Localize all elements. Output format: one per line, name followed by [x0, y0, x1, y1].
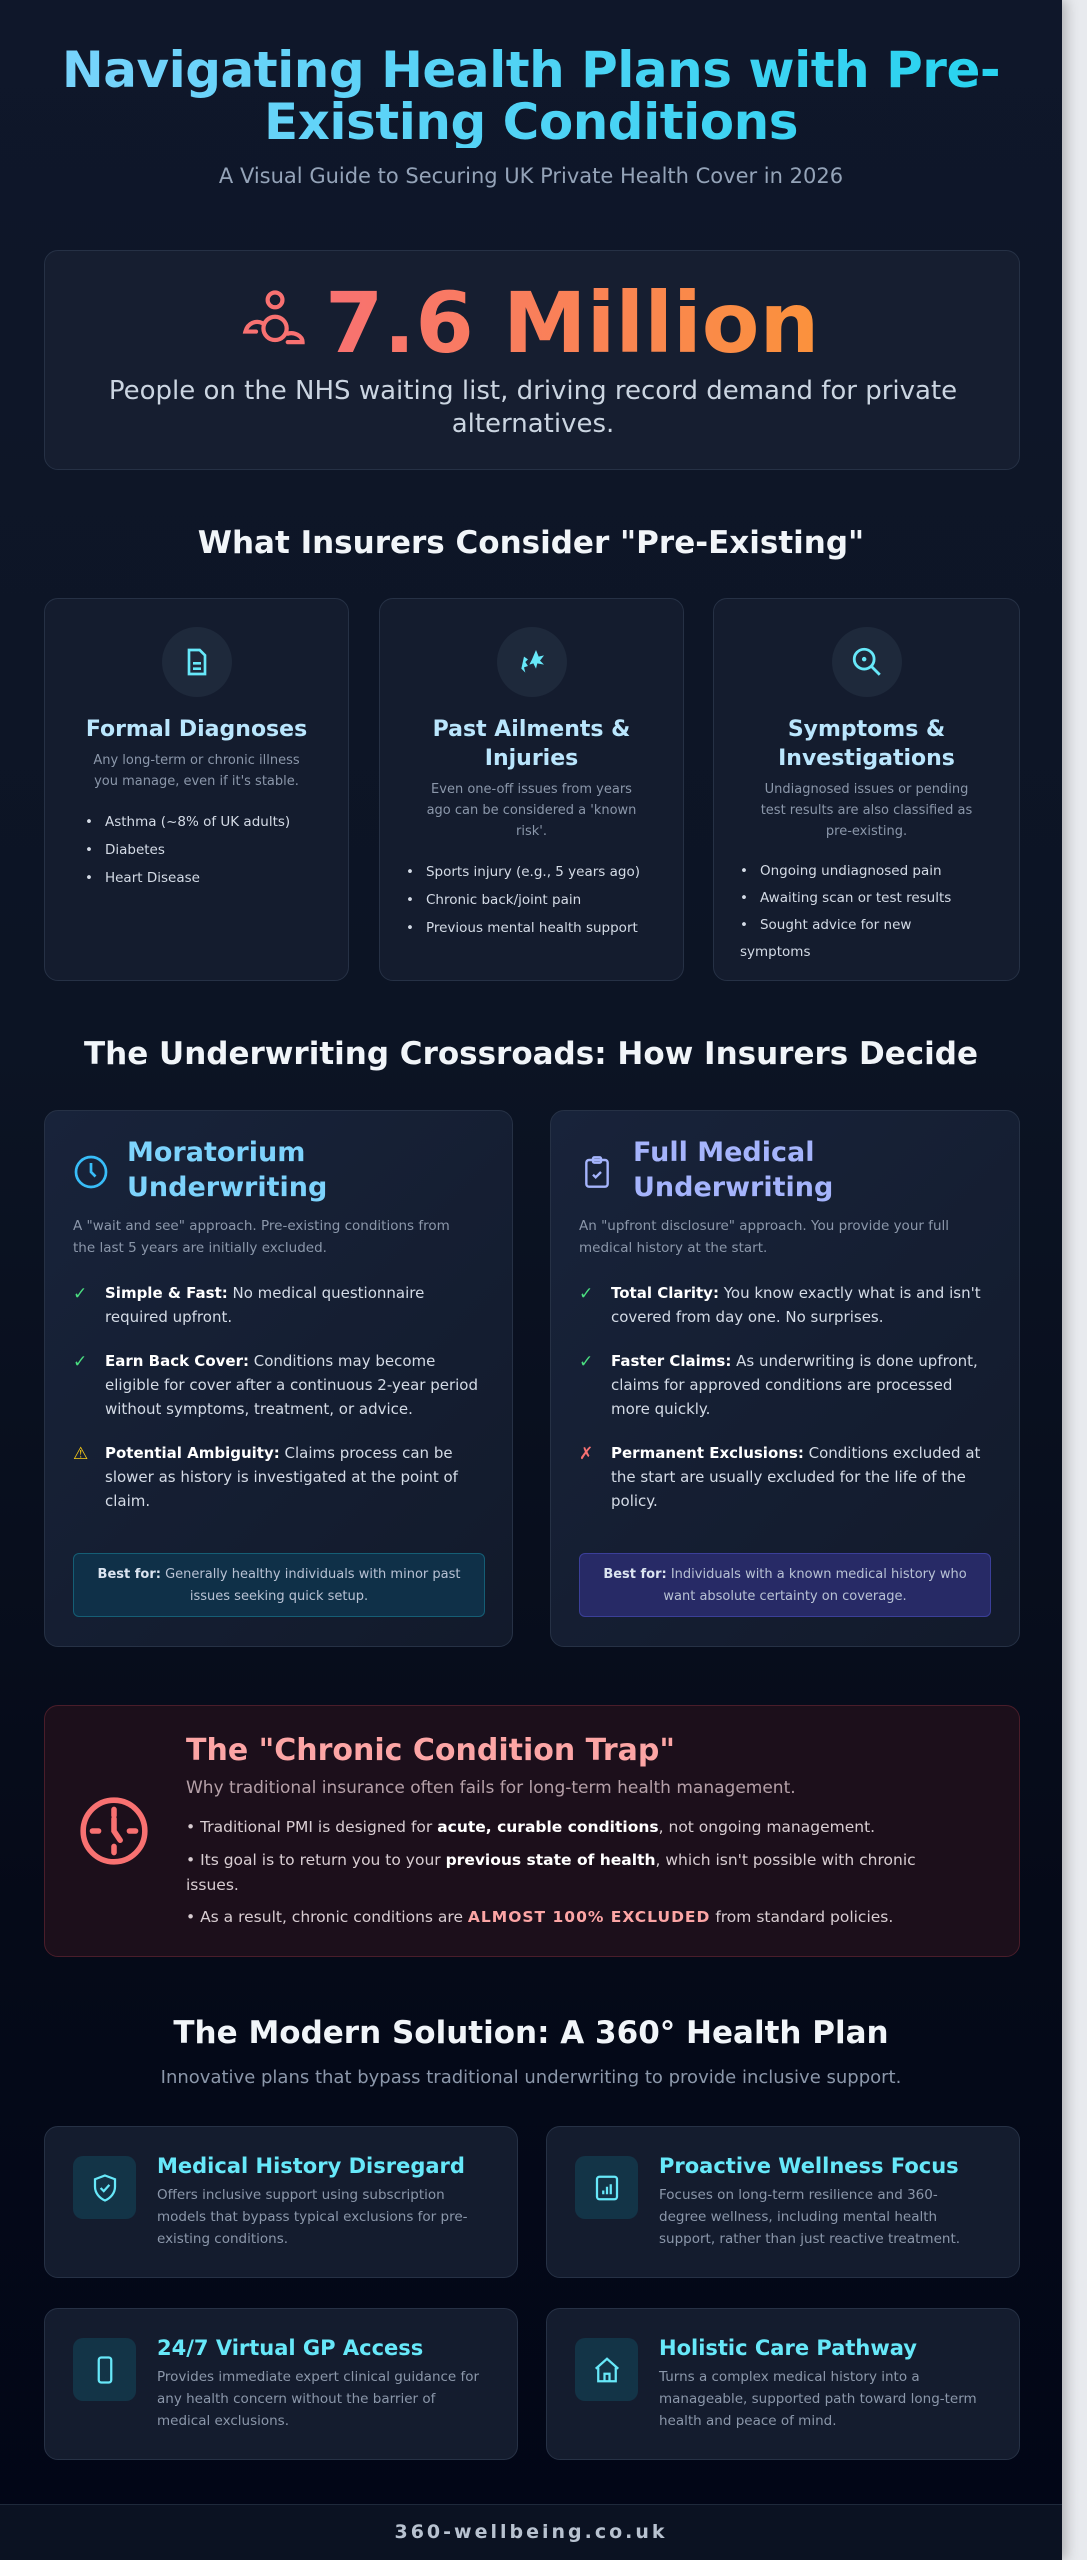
- big number: 7.6 Million: [325, 274, 819, 372]
- panel: past ailments: Previous mental health support: [426, 920, 638, 936]
- panel: chronic condition trap: [44, 1705, 1020, 1957]
- feature: holistic care: Turns a complex medical history into a manageable, supported path toward long-term health and peace of mind.: [659, 2369, 977, 2429]
- panel: full medical: ✓: [579, 1284, 593, 1304]
- panel: moratorium: Moratorium: [127, 1137, 305, 1168]
- panel: moratorium: Simple & Fast: No medical questionnaire required upfront.: [105, 1284, 424, 1326]
- subtitle: A Visual Guide to Securing UK Private Health Cover in 2026: [219, 164, 843, 188]
- icon: injury: [496, 627, 566, 697]
- feature: virtual gp: 24/7 Virtual GP Access: [157, 2336, 423, 2360]
- panel: chronic condition trap: • Traditional PMI is designed for acute, curable conditions, not ongoing management.: [186, 1818, 875, 1836]
- panel: formal diagnoses: Diabetes: [105, 842, 165, 858]
- feature: proactive wellness: Focuses on long-term resilience and 360-degree wellness, including mental health support, rather than just reactive treatment.: [659, 2187, 960, 2247]
- panel: chronic condition trap: The "Chronic Condition Trap": [186, 1733, 675, 1768]
- heading: modern solution: The Modern Solution: A 360° Health Plan: [173, 2015, 889, 2051]
- panel: moratorium: ✓: [73, 1352, 87, 1372]
- heading: pre-existing: What Insurers Consider "Pre-Existing": [198, 525, 864, 561]
- icon: stopwatch: [80, 1797, 148, 1865]
- panel: formal diagnoses: Any long-term or chronic illness you manage, even if it's stable.: [93, 753, 300, 789]
- panel: past ailments: Chronic back/joint pain: [426, 892, 581, 908]
- icon: magnifier: [832, 627, 902, 697]
- icon: document: [162, 627, 232, 697]
- panel: chronic condition trap: Why traditional insurance often fails for long-term health management.: [186, 1778, 796, 1798]
- panel: moratorium: Underwriting: [127, 1172, 327, 1203]
- panel: past ailments: Injuries: [485, 746, 578, 771]
- panel: symptoms: [713, 598, 1020, 981]
- feature: virtual gp: [44, 2308, 518, 2460]
- panel: full medical: ✓: [579, 1352, 593, 1372]
- subheading: Innovative plans that bypass traditional underwriting to provide inclusive support.: [161, 2067, 901, 2088]
- feature: medical history disregard: Medical History Disregard: [157, 2154, 465, 2178]
- panel: full medical: Underwriting: [633, 1172, 833, 1203]
- feature: medical history disregard: [44, 2126, 518, 2278]
- panel: moratorium: A "wait and see" approach. Pre-existing conditions from the last 5 years are initially excluded.: [73, 1218, 450, 1256]
- panel: full medical: Faster Claims: As underwriting is done upfront, claims for approved conditions are processed more quickly.: [611, 1352, 978, 1418]
- panel: moratorium: Earn Back Cover: Conditions may become eligible for cover after a continuous 2-year period without symptoms, treatment, or advice.: [105, 1352, 478, 1418]
- panel: past ailments: [379, 598, 684, 981]
- panel: moratorium: Potential Ambiguity: Claims process can be slower as history is investigated at the point of claim.: [105, 1444, 458, 1510]
- panel: formal diagnoses: Heart Disease: [105, 870, 200, 886]
- best for box: [579, 1553, 991, 1617]
- feature: virtual gp: Provides immediate expert clinical guidance for any health concern without the barrier of medical exclusions.: [157, 2369, 479, 2429]
- icon: people: [242, 290, 305, 344]
- panel: chronic condition trap: • Its goal is to return you to your previous state of health, which isn't possible with chronic issues.: [186, 1851, 916, 1894]
- panel: statistic: [44, 250, 1020, 470]
- panel: full medical: An "upfront disclosure" approach. You provide your full medical history at the start.: [579, 1218, 949, 1256]
- panel: formal diagnoses: [44, 598, 349, 981]
- feature: holistic care: Holistic Care Pathway: [659, 2336, 917, 2360]
- best for box: Best for: Generally healthy individuals with minor past issues seeking quick setup.: [98, 1567, 460, 1604]
- panel: chronic condition trap: • As a result, chronic conditions are ALMOST 100% EXCLUDED from standard policies.: [186, 1908, 893, 1926]
- panel: formal diagnoses: Formal Diagnoses: [86, 717, 307, 742]
- feature: holistic care: [546, 2308, 1020, 2460]
- panel: moratorium: [44, 1110, 513, 1647]
- best for box: [73, 1553, 485, 1617]
- panel: moratorium: ⚠: [73, 1444, 88, 1464]
- feature: medical history disregard: Offers inclusive support using subscription models that bypass typical exclusions for pre-existing conditions.: [157, 2187, 468, 2247]
- best for box: Best for: Individuals with a known medical history who want absolute certainty on coverage.: [603, 1567, 967, 1604]
- panel: past ailments: Sports injury (e.g., 5 years ago): [426, 864, 640, 880]
- feature: proactive wellness: [546, 2126, 1020, 2278]
- panel: full medical: ✗: [579, 1444, 593, 1464]
- title: Existing Conditions: [264, 93, 798, 151]
- footer: [0, 2504, 1062, 2560]
- panel: symptoms: Awaiting scan or test results: [760, 890, 951, 906]
- icon: clock: [74, 1156, 108, 1188]
- panel: symptoms: Undiagnosed issues or pending test results are also classified as pre-existing.: [761, 782, 972, 839]
- icon: clipboard: [585, 1156, 609, 1188]
- panel: full medical: [550, 1110, 1020, 1647]
- panel: symptoms: Ongoing undiagnosed pain: [760, 863, 942, 879]
- panel: past ailments: Past Ailments &: [433, 717, 630, 742]
- title: Navigating Health Plans with Pre-: [62, 41, 1000, 99]
- panel: formal diagnoses: Asthma (~8% of UK adults): [105, 814, 290, 830]
- footer: 360-wellbeing.co.uk: [394, 2521, 668, 2543]
- panel: full medical: Total Clarity: You know exactly what is and isn't covered from day one. No surprises.: [611, 1284, 981, 1326]
- title: [62, 41, 1000, 151]
- panel: symptoms: Investigations: [778, 746, 955, 771]
- panel: past ailments: Even one-off issues from years ago can be considered a 'known risk'.: [427, 782, 636, 839]
- panel: symptoms: Symptoms &: [788, 717, 945, 742]
- stat description: People on the NHS waiting list, driving record demand for private alternatives.: [109, 376, 957, 439]
- feature: proactive wellness: Proactive Wellness Focus: [659, 2154, 959, 2178]
- panel: full medical: Permanent Exclusions: Conditions excluded at the start are usually excluded for the life of the policy.: [611, 1444, 980, 1510]
- panel: full medical: Full Medical: [633, 1137, 814, 1168]
- panel: symptoms: Sought advice for new symptoms: [740, 917, 911, 960]
- heading: underwriting: The Underwriting Crossroads: How Insurers Decide: [84, 1036, 978, 1072]
- panel: moratorium: ✓: [73, 1284, 87, 1304]
